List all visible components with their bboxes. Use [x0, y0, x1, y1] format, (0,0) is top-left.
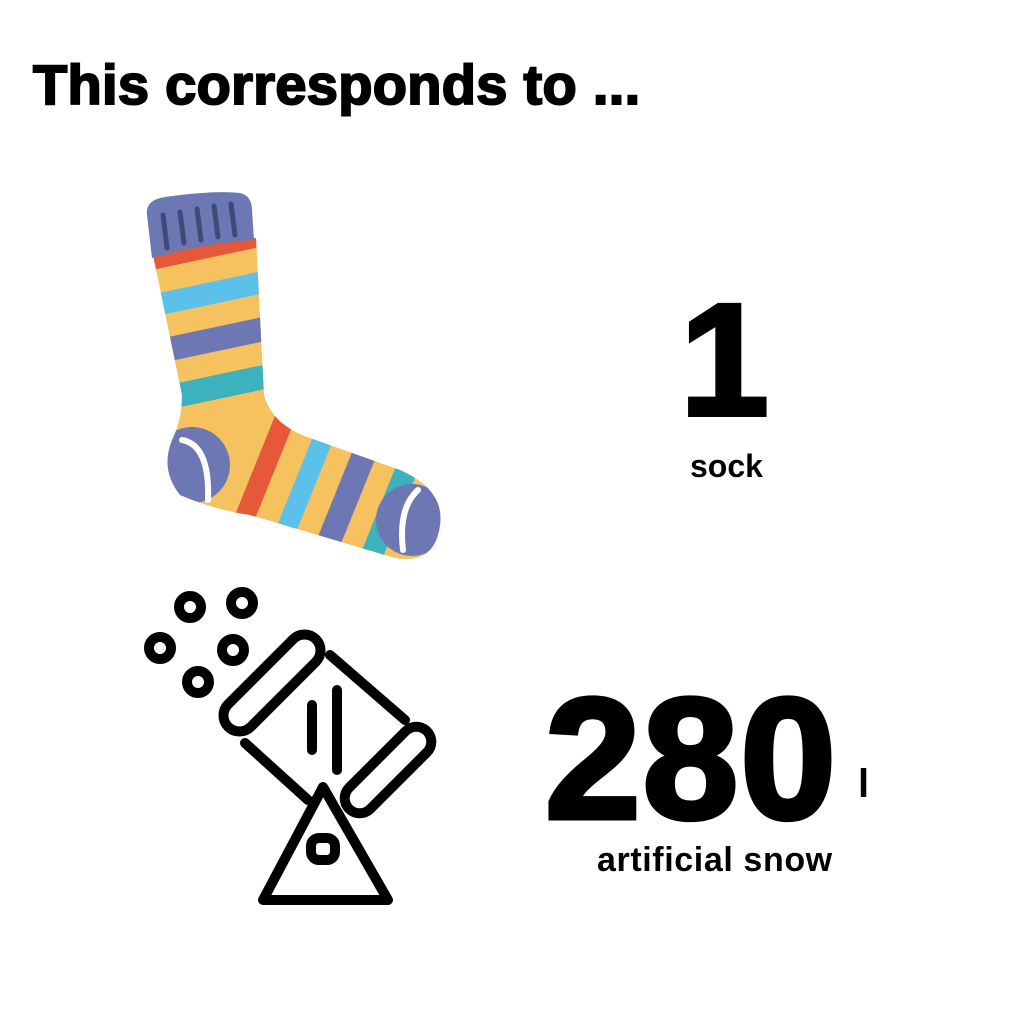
label: artificial snow: artificial snow: [597, 841, 833, 879]
unit: l: l: [858, 762, 869, 806]
title: This corresponds to ...: [33, 53, 640, 116]
label: sock: sock: [690, 448, 763, 484]
number: 280: 280: [545, 663, 838, 855]
icon: sock: [146, 192, 440, 559]
number: 1: 1: [680, 270, 769, 449]
